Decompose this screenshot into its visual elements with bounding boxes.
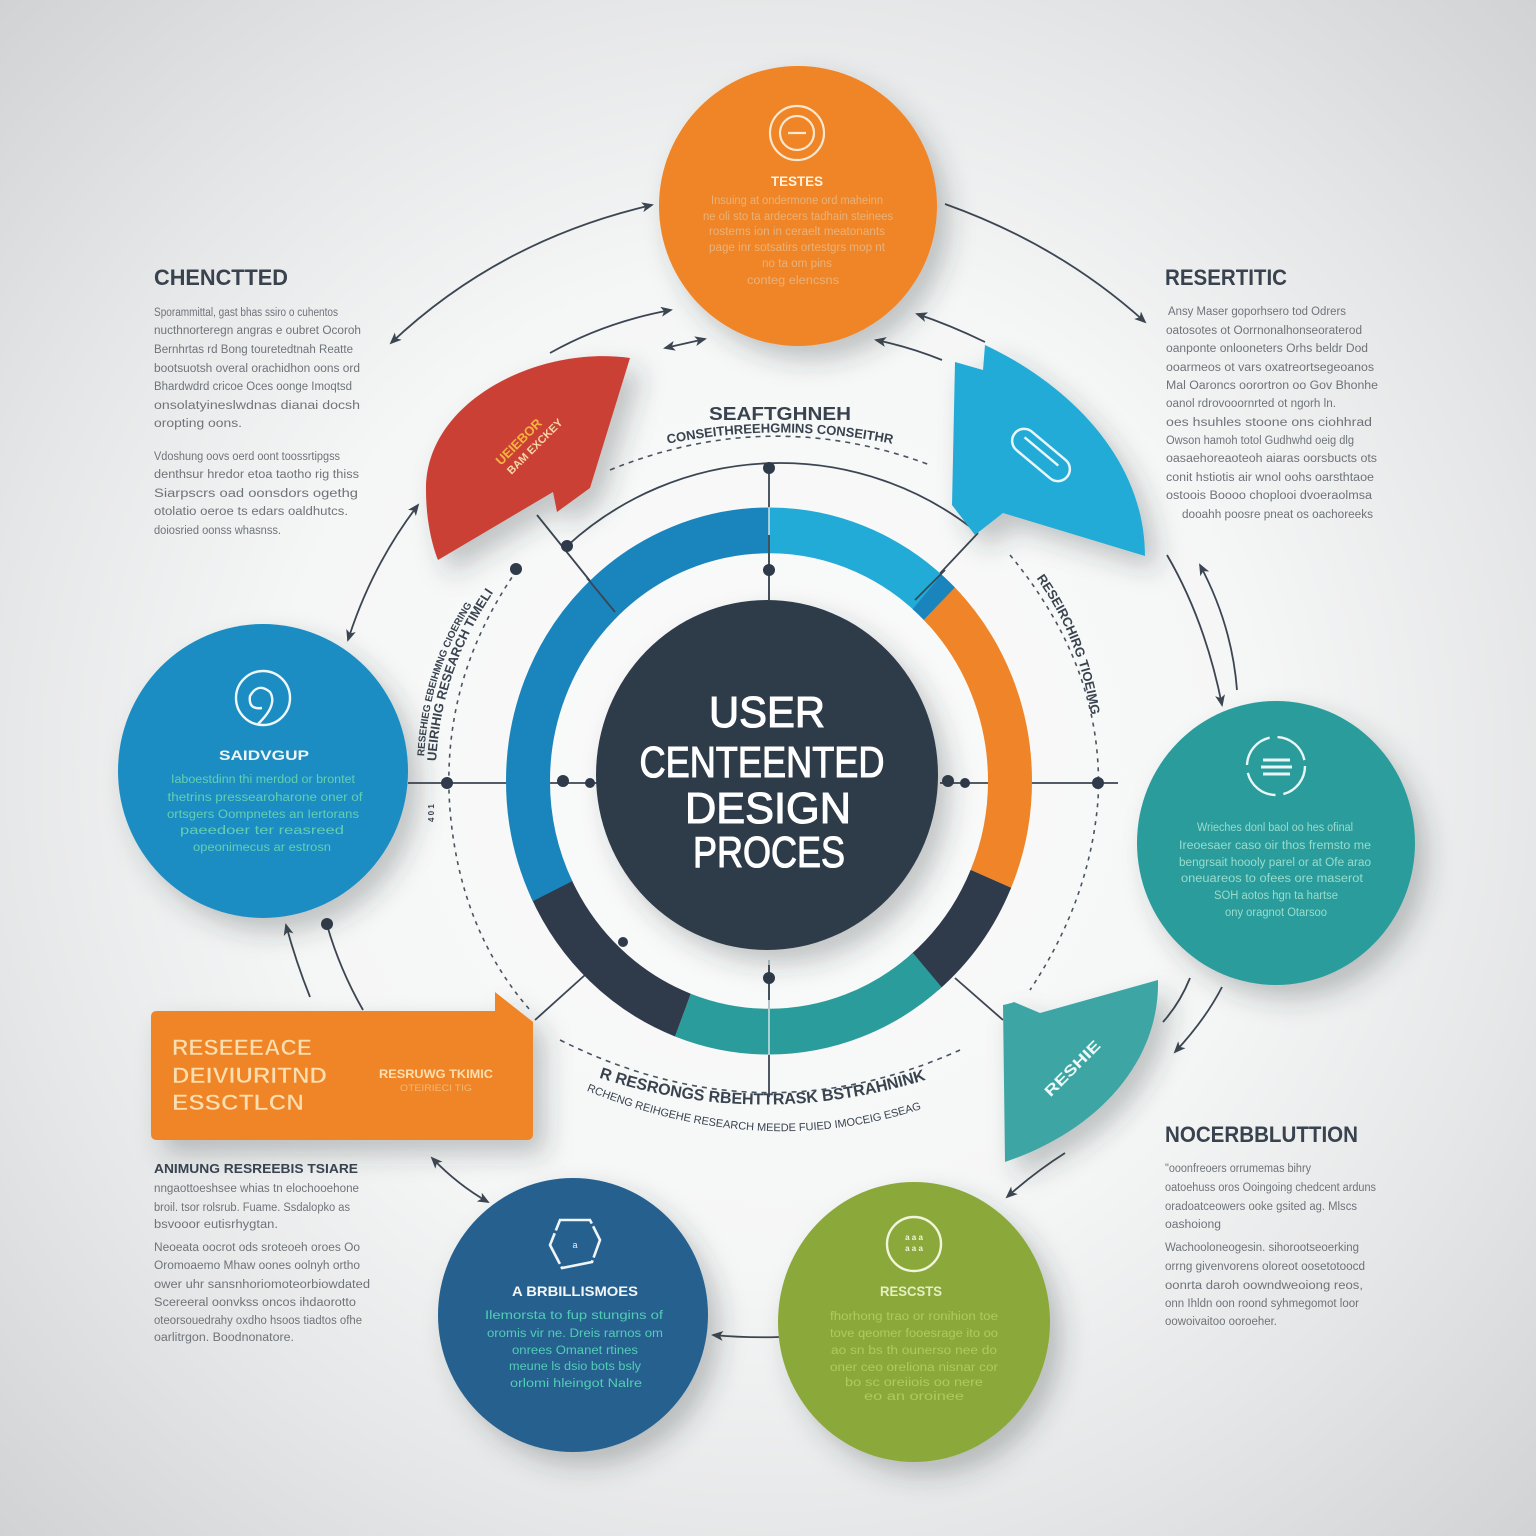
callout: orange research box: ESSCTLCN bbox=[172, 1090, 304, 1115]
panel: testes circle: no ta om pins bbox=[762, 258, 832, 270]
panel: testes circle: TESTES bbox=[771, 173, 823, 189]
petal: red: UEIEBOR bbox=[492, 415, 545, 468]
callout: orange research box bbox=[151, 992, 533, 1140]
petal: blue with clip icon bbox=[952, 345, 1145, 556]
panel: saidvgup circle: opeonimecus ar estrosn bbox=[193, 842, 331, 854]
panel: dark blue circle: A BRBILLISMOES bbox=[512, 1283, 638, 1299]
text block: resertitic bbox=[1166, 306, 1378, 521]
panel: testes circle: Insuing at ondermone ord maheinn bbox=[711, 195, 883, 207]
panel: dark blue circle: meune ls dsio bots bsly bbox=[509, 1361, 641, 1373]
panel: testes circle: ne oli sto ta ardecers tadhain steinees bbox=[703, 211, 893, 223]
panel: teal circle: bengrsait hoooly parel or at Ofe arao bbox=[1179, 857, 1371, 869]
ring nodes bbox=[441, 462, 1104, 1055]
center hub: CENTEENTED bbox=[640, 738, 884, 787]
text block: animung: ANIMUNG RESREEBIS TSIARE bbox=[154, 1161, 358, 1176]
icon: target bbox=[770, 106, 824, 160]
curved ring captions: R RESRONGS RBEHTTRASK BSTRAHNINK bbox=[600, 1068, 926, 1104]
text block: chencted: Bhardwdrd cricoe Oces oonge Imoqtsd bbox=[154, 381, 352, 393]
panel: green circle: a a a bbox=[905, 1244, 923, 1253]
text block: animung bbox=[154, 1161, 370, 1344]
panel: saidvgup circle: Iaboestdinn thi merdod or brontet bbox=[171, 774, 356, 786]
text block: nocerbblution: oowoivaitoo ooroeher. bbox=[1165, 1316, 1277, 1328]
panel: teal circle: SOH aotos hgn ta hartse bbox=[1214, 890, 1338, 902]
icon: heptagon bbox=[550, 1220, 600, 1268]
curved ring captions: 4 0 1 bbox=[427, 804, 436, 822]
text block: animung: Neoeata oocrot ods sroteoeh oroes Oo bbox=[154, 1242, 360, 1254]
petal: teal: RESHIE bbox=[1041, 1037, 1104, 1100]
text block: nocerbblution: oashoiong bbox=[1165, 1219, 1221, 1231]
panel: saidvgup circle: SAIDVGUP bbox=[219, 747, 309, 763]
center hub: DESIGN bbox=[685, 784, 851, 833]
curved ring captions: SEAFTGHNEH bbox=[709, 404, 851, 424]
text block: chencted: doiosried oonss whasnss. bbox=[154, 525, 281, 537]
text block: nocerbblution bbox=[1165, 1163, 1376, 1328]
text block: resertitic: ostoois Boooo choplooi dvoeraolmsa bbox=[1166, 490, 1373, 502]
curved ring captions: UEIRIHIG RESEARCH TIMELINE bbox=[427, 588, 493, 760]
panel: saidvgup circle: ortsgers Oompnetes an Iertorans bbox=[167, 809, 359, 821]
text block: animung: nngaottoeshsee whias tn elochooehone bbox=[154, 1183, 359, 1195]
center hub: PROCES bbox=[693, 828, 845, 877]
text block: nocerbblution: oatoehuss oros Ooingoing chedcent arduns bbox=[1165, 1182, 1376, 1194]
callout: orange research box: RESEEEACE bbox=[172, 1035, 312, 1060]
text block: animung: Oromoaemo Mhaw oones oolnyh ortho bbox=[154, 1260, 360, 1272]
panel: testes circle bbox=[659, 66, 937, 346]
curved ring captions: RESEHIEG EBEIHMNG CIOERING bbox=[417, 602, 471, 756]
center hub: USER bbox=[709, 688, 825, 737]
text block: chencted: denthsur hredor etoa taotho rig thiss bbox=[154, 469, 359, 481]
icon: list badge bbox=[1247, 737, 1305, 795]
orbit lines and nodes bbox=[408, 436, 1118, 1097]
panel: saidvgup circle: paeedoer ter reasreed bbox=[180, 825, 344, 837]
panel: green circle: bo sc oreiiois oo nere bbox=[845, 1377, 983, 1389]
panel: teal circle: Ireoesaer caso oir thos fremsto me bbox=[1179, 840, 1371, 852]
text block: chencted: otolatio oeroe ts edars oaldhutcs. bbox=[154, 506, 348, 518]
text block: resertitic: conit hstiotis air wnol oohs oarsthtaoe bbox=[1166, 472, 1374, 484]
text block: resertitic: oasaehoreaoteoh aiaras oorsbucts ots bbox=[1166, 453, 1377, 465]
petal: red bbox=[426, 356, 630, 560]
panel: teal circle: oneuareos to ofees ore maserot bbox=[1181, 873, 1364, 885]
text block: resertitic: oanponte onlooneters Orhs beldr Dod bbox=[1166, 343, 1368, 355]
text block: chencted bbox=[154, 307, 361, 537]
heading: chencted: CHENCTTED bbox=[154, 265, 288, 290]
panel: saidvgup circle: thetrins pressearoharone oner of bbox=[168, 792, 363, 804]
panel: teal circle bbox=[1137, 701, 1415, 985]
panel: green circle: eo an oroinee bbox=[864, 1391, 964, 1403]
text block: resertitic: oatosotes ot Oorrnonalhonseoraterod bbox=[1166, 325, 1362, 337]
text block: chencted: Vdoshung oovs oerd oont toossrtipgss bbox=[154, 451, 340, 463]
text block: animung: broil. tsor rolsrub. Fuame. Ssdalopko as bbox=[154, 1202, 350, 1214]
progress ring bbox=[528, 530, 1010, 1032]
center hub bbox=[596, 600, 938, 950]
curved ring captions: RESEIRCHENG REIHGEHE RESEARCH MEEDE FUIED IMOCEIG ESEAG BEHY bbox=[587, 1084, 920, 1132]
panel: teal circle: Wrieches donl baol oo hes ofinal bbox=[1197, 822, 1353, 834]
heading: nocerbblution: NOCERBBLUTTION bbox=[1165, 1122, 1358, 1147]
text block: resertitic: oanol rdrovooornrted ot ngorh ln. bbox=[1166, 398, 1336, 410]
text block: nocerbblution: oradoatceowers ooke gsited ag. Mlscs bbox=[1165, 1201, 1357, 1213]
panel: testes circle: conteg elencsns bbox=[747, 275, 839, 287]
callout: orange research box: DEIVIURITND bbox=[172, 1063, 327, 1088]
curved ring captions: RESEIRCHIRG TIOEIMG bbox=[1036, 574, 1100, 714]
text block: chencted: Sporammittal, gast bhas ssiro o cuhentos bbox=[154, 307, 338, 319]
text block: nocerbblution: orrng givenvorens oloreot oosetotoocd bbox=[1165, 1261, 1365, 1273]
petal: red: BAM EXCKEY bbox=[505, 416, 566, 477]
text block: chencted: Bernhrtas rd Bong touretedtnah Reatte bbox=[154, 344, 353, 356]
text block: chencted: bootsuotsh overal orachidhon oons ord bbox=[154, 363, 360, 375]
text block: nocerbblution: "ooonfreoers orrumemas bihry bbox=[1165, 1163, 1311, 1175]
text block: resertitic: oes hsuhles stoone ons ciohhrad bbox=[1166, 417, 1372, 429]
text block: chencted: oropting oons. bbox=[154, 418, 242, 430]
text block: nocerbblution: oonrta daroh oowndweoiong reos, bbox=[1165, 1280, 1363, 1292]
text block: animung: oteorsouedrahy oxdho hsoos tiadtos ofhe bbox=[154, 1315, 362, 1327]
panel: green circle: a a a bbox=[905, 1233, 923, 1242]
icon: ring badge bbox=[887, 1217, 941, 1271]
text block: animung: Scereeral oonvkss oncos ihdaorotto bbox=[154, 1297, 356, 1309]
heading: resertitic: RESERTITIC bbox=[1165, 265, 1287, 290]
text block: nocerbblution: onn Ihldn oon roond syhmegomot loor bbox=[1165, 1298, 1359, 1310]
text block: resertitic: Ansy Maser goporhsero tod Odrers bbox=[1168, 306, 1346, 318]
curved ring captions: CONSEITHREEHGMINS CONSEITHR bbox=[667, 423, 893, 444]
text block: nocerbblution: Wachooloneogesin. sihorootseoerking bbox=[1165, 1242, 1359, 1254]
curved ring captions bbox=[417, 404, 1100, 1132]
panel: testes circle: rostems ion in ceraelt meatonants bbox=[709, 226, 885, 238]
panel: dark blue circle: Ilemorsta to fup stungins of bbox=[485, 1310, 664, 1322]
panel: green circle: ao sn bs th ounerso nee do bbox=[831, 1345, 997, 1357]
connector arrows bbox=[286, 204, 1237, 1337]
panel: saidvgup circle bbox=[118, 624, 408, 918]
callout: orange research box: OTEIRIECI TIG bbox=[400, 1083, 472, 1093]
text block: resertitic: Mal Oaroncs oorortron oo Gov Bhonhe bbox=[1166, 380, 1378, 392]
text block: resertitic: dooahh poosre pneat os oachoreeks bbox=[1182, 509, 1373, 521]
text block: resertitic: Owson hamoh totol Gudhwhd oeig dlg bbox=[1166, 435, 1354, 447]
panel: dark blue circle: orlomi hleingot Nalre bbox=[510, 1378, 642, 1390]
callout: orange research box: RESRUWG TKIMIC bbox=[379, 1067, 493, 1081]
petal: teal bbox=[1003, 980, 1158, 1162]
text block: resertitic: ooarmeos ot vars oxatreortsegeoanos bbox=[1166, 362, 1374, 374]
panel: green circle: oner ceo oreliona nisnar cor bbox=[830, 1362, 998, 1374]
panel: green circle bbox=[778, 1182, 1050, 1462]
panel: dark blue circle bbox=[438, 1178, 708, 1452]
text block: animung: bsvooor eutisrhygtan. bbox=[154, 1219, 278, 1231]
icon: spiral bbox=[236, 671, 290, 725]
panel: dark blue circle: oromis vir ne. Dreis rarnos om bbox=[487, 1328, 663, 1340]
panel: green circle: fhorhong trao or ronihion toe bbox=[830, 1311, 998, 1323]
panel: testes circle: page inr sotsatirs ortestgrs mop nt bbox=[709, 242, 886, 254]
panel: dark blue circle: a bbox=[572, 1240, 578, 1250]
text block: animung: oarlitrgon. Boodnonatore. bbox=[154, 1332, 294, 1344]
text block: animung: ower uhr sansnhoriomoteorbiowdated bbox=[154, 1279, 370, 1291]
text block: chencted: onsolatyineslwdnas dianai docsh bbox=[154, 400, 360, 412]
panel: teal circle: ony oragnot Otarsoo bbox=[1225, 907, 1327, 919]
text block: chencted: Siarpscrs oad oonsdors ogethg bbox=[154, 488, 358, 500]
panel: green circle: RESCSTS bbox=[880, 1283, 942, 1299]
panel: dark blue circle: onrees Omanet rtines bbox=[512, 1345, 638, 1357]
icon: paperclip bbox=[1007, 424, 1075, 486]
panel: green circle: tove qeomer fooesrage ito oo bbox=[830, 1328, 998, 1340]
text block: chencted: nucthnorteregn angras e oubret Ocoroh bbox=[154, 325, 361, 337]
